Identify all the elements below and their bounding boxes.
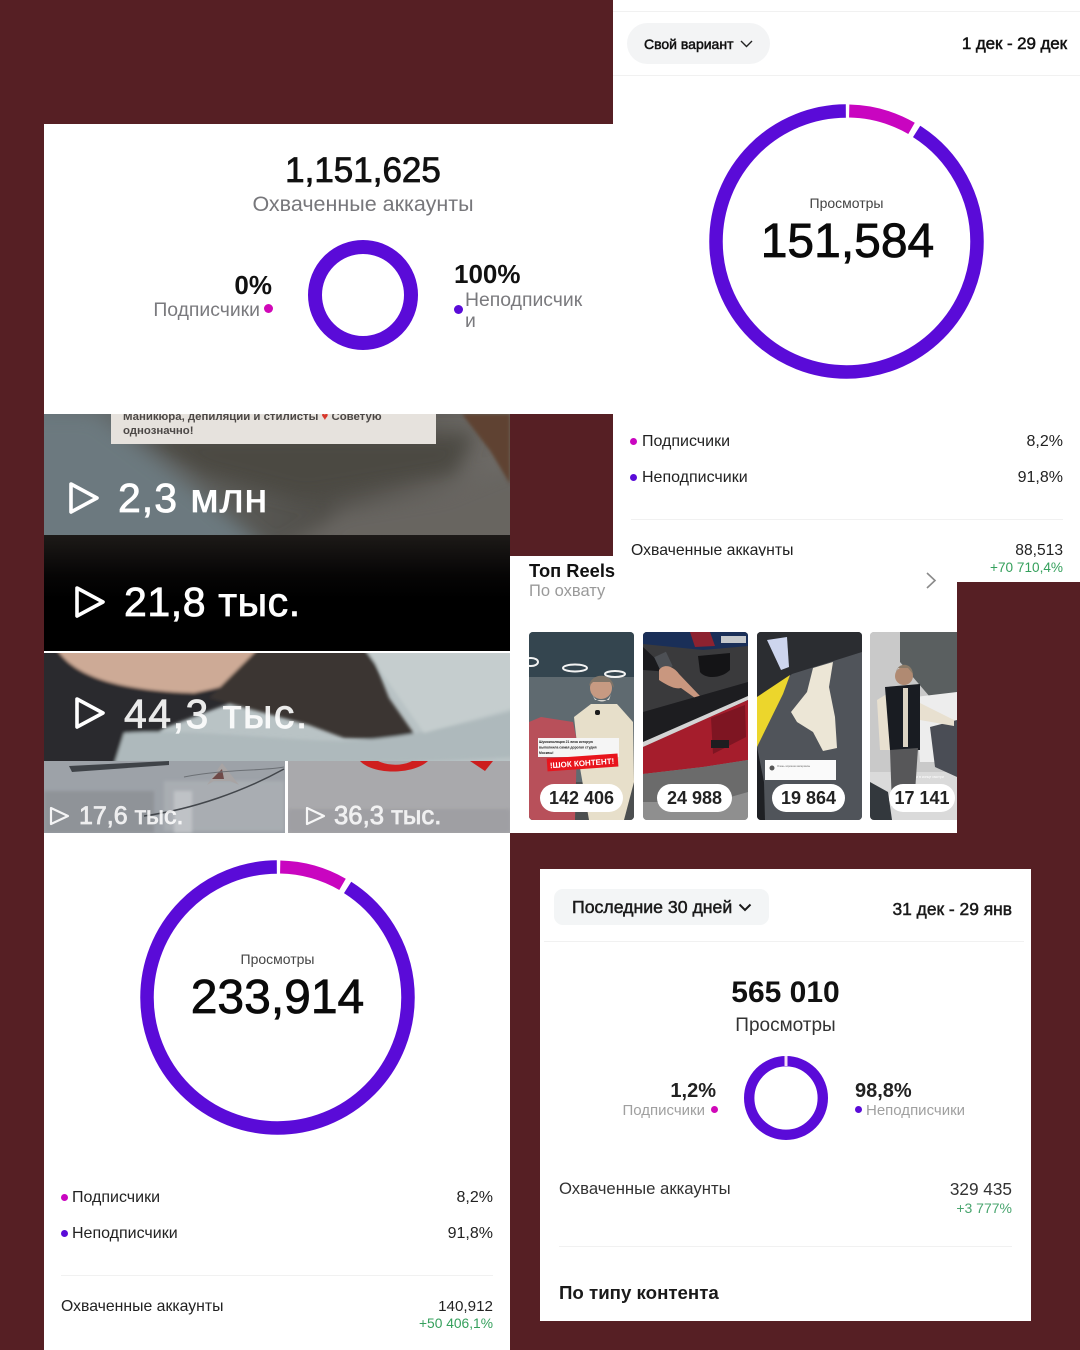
reel thumbnail 1 bbox=[529, 632, 634, 820]
reel thumbnail 1: Шумоизоляция 21 века которую bbox=[539, 740, 593, 744]
stat: subscribers 1,2%: 1,2% bbox=[670, 1080, 716, 1102]
reel thumbnail 2 bbox=[643, 632, 748, 820]
ring chart: 151,584 views bbox=[709, 104, 984, 379]
stat: subscribers 0% bbox=[153, 270, 273, 321]
reel tile: 2,3 млн bbox=[44, 414, 510, 535]
view pill bbox=[889, 784, 955, 812]
legend: subscribers: Подписчики bbox=[642, 433, 730, 450]
reel thumbnail 4: и в конце смотри bbox=[916, 775, 944, 779]
legend: non-subscribers: Неподписчики bbox=[642, 469, 748, 486]
view pill bbox=[772, 784, 845, 812]
stat: subscribers 1,2% bbox=[622, 1080, 718, 1119]
legend: non-subscribers bbox=[61, 1225, 493, 1242]
reached accounts row: Охваченные аккаунты bbox=[61, 1298, 223, 1315]
legend: non-subscribers bbox=[630, 469, 1063, 486]
reel tile: 36,3 тыс. bbox=[288, 761, 510, 833]
legend: subscribers bbox=[630, 433, 1063, 450]
legend: subscribers: 8,2% bbox=[457, 1189, 493, 1206]
icon: play bbox=[75, 586, 105, 618]
ring chart: 233,914 views: Просмотры bbox=[240, 951, 314, 967]
reel thumbnail 3: Очень хорошие материалы bbox=[777, 764, 810, 768]
stat: non-subscribers 98,8%: Неподписчики bbox=[866, 1102, 965, 1119]
period selector bbox=[554, 889, 769, 925]
caption card bbox=[111, 404, 436, 444]
reached accounts row: +70 710,4% bbox=[990, 560, 1063, 575]
panel: views period December bbox=[613, 0, 1080, 582]
reached accounts row: Охваченные аккаунты bbox=[559, 1179, 731, 1198]
legend: non-subscribers: 91,8% bbox=[1018, 469, 1063, 486]
stat: non-subscribers 98,8%: 98,8% bbox=[855, 1080, 912, 1102]
reel thumbnail 1: !ШОК КОНТЕНТ! bbox=[550, 757, 615, 770]
period selector: Свой вариант bbox=[644, 36, 734, 52]
date range: 31 дек - 29 янв bbox=[892, 899, 1012, 919]
panel: views 233,914 bbox=[44, 833, 510, 1350]
reached accounts row bbox=[559, 1179, 1012, 1216]
stat: non-subscribers 100%: 100% bbox=[454, 259, 520, 289]
period selector: Последние 30 дней bbox=[572, 897, 732, 917]
stat: non-subscribers 98,8% bbox=[855, 1080, 965, 1119]
view pill: 19 864 bbox=[781, 788, 836, 808]
stat: non-subscribers 100%: Неподписчик bbox=[465, 289, 582, 311]
icon: play bbox=[50, 806, 70, 826]
reel thumbnail 1: выполнила самая дорогая студия bbox=[539, 746, 597, 750]
legend: non-subscribers: Неподписчики bbox=[72, 1225, 178, 1242]
caption card: однозначно! bbox=[123, 425, 194, 437]
view count: 36,3 тыс. bbox=[334, 802, 441, 830]
headline caption: Просмотры bbox=[735, 1015, 836, 1036]
stat: subscribers 1,2%: Подписчики bbox=[622, 1102, 705, 1119]
photo strip: reel view counters bbox=[44, 414, 510, 833]
subheading: По охвату bbox=[529, 582, 605, 600]
headline caption: Охваченные аккаунты bbox=[252, 192, 474, 216]
ring chart: 233,914 views: 233,914 bbox=[191, 971, 364, 1024]
reached accounts row bbox=[61, 1298, 493, 1331]
icon: play bbox=[306, 807, 326, 826]
legend: subscribers bbox=[61, 1189, 493, 1206]
reached accounts row: 140,912 bbox=[438, 1298, 493, 1315]
period selector bbox=[627, 23, 770, 64]
reached accounts row: Охваченные аккаунты bbox=[631, 542, 793, 559]
icon: play bbox=[69, 482, 99, 514]
panel: top reels bbox=[510, 556, 957, 833]
view pill: 24 988 bbox=[667, 788, 722, 808]
headline number: 565 010 bbox=[731, 976, 840, 1009]
reel thumbnail 1: Москвы! bbox=[539, 751, 554, 755]
stat: subscribers 0%: Подписчики bbox=[153, 299, 260, 321]
panel: views last 30 days bbox=[540, 869, 1031, 1321]
view count: 2,3 млн bbox=[118, 475, 268, 521]
headline number: 1,151,625 bbox=[285, 151, 441, 190]
stat: non-subscribers 100% bbox=[454, 259, 582, 332]
legend: subscribers: 8,2% bbox=[1027, 433, 1063, 450]
view pill: 142 406 bbox=[549, 788, 614, 808]
reached accounts row: +3 777% bbox=[956, 1200, 1012, 1216]
ring chart: 151,584 views: 151,584 bbox=[761, 215, 934, 268]
reached accounts row: 329 435 bbox=[950, 1179, 1012, 1199]
ring chart: 100% non-subscribers bbox=[308, 240, 418, 350]
heading: Топ Reels bbox=[529, 560, 615, 581]
reel thumbnail 4 bbox=[870, 632, 957, 820]
reached accounts row: 88,513 bbox=[1015, 542, 1063, 559]
ring chart: 151,584 views: Просмотры bbox=[810, 195, 884, 211]
view pill bbox=[540, 784, 623, 812]
stat: subscribers 0%: 0% bbox=[234, 270, 272, 300]
ring chart: 98,8% non-subscribers bbox=[744, 1056, 828, 1140]
stat: non-subscribers 100%: и bbox=[465, 310, 476, 332]
reel tile: 17,6 тыс. bbox=[44, 761, 285, 833]
view count: 44,3 тыс. bbox=[124, 691, 309, 737]
view count: 21,8 тыс. bbox=[124, 579, 301, 625]
legend: subscribers: Подписчики bbox=[72, 1189, 160, 1206]
section heading: По типу контента bbox=[559, 1282, 719, 1303]
reel thumbnail 3 bbox=[757, 632, 862, 820]
view count: 17,6 тыс. bbox=[79, 802, 183, 830]
icon: chevron right bbox=[926, 572, 936, 588]
view pill bbox=[657, 784, 732, 812]
reel tile: 21,8 тыс. bbox=[44, 535, 510, 651]
panel: reached accounts 1,151,625 bbox=[44, 124, 613, 414]
date range: 1 дек - 29 дек bbox=[962, 34, 1067, 53]
reached accounts row: +50 406,1% bbox=[419, 1316, 493, 1331]
view pill: 17 141 bbox=[894, 788, 950, 808]
icon: play bbox=[75, 697, 105, 729]
ring chart: 233,914 views bbox=[140, 860, 415, 1135]
legend: non-subscribers: 91,8% bbox=[448, 1225, 493, 1242]
reel tile: 44,3 тыс. bbox=[44, 653, 510, 761]
reached accounts row bbox=[631, 542, 1063, 575]
